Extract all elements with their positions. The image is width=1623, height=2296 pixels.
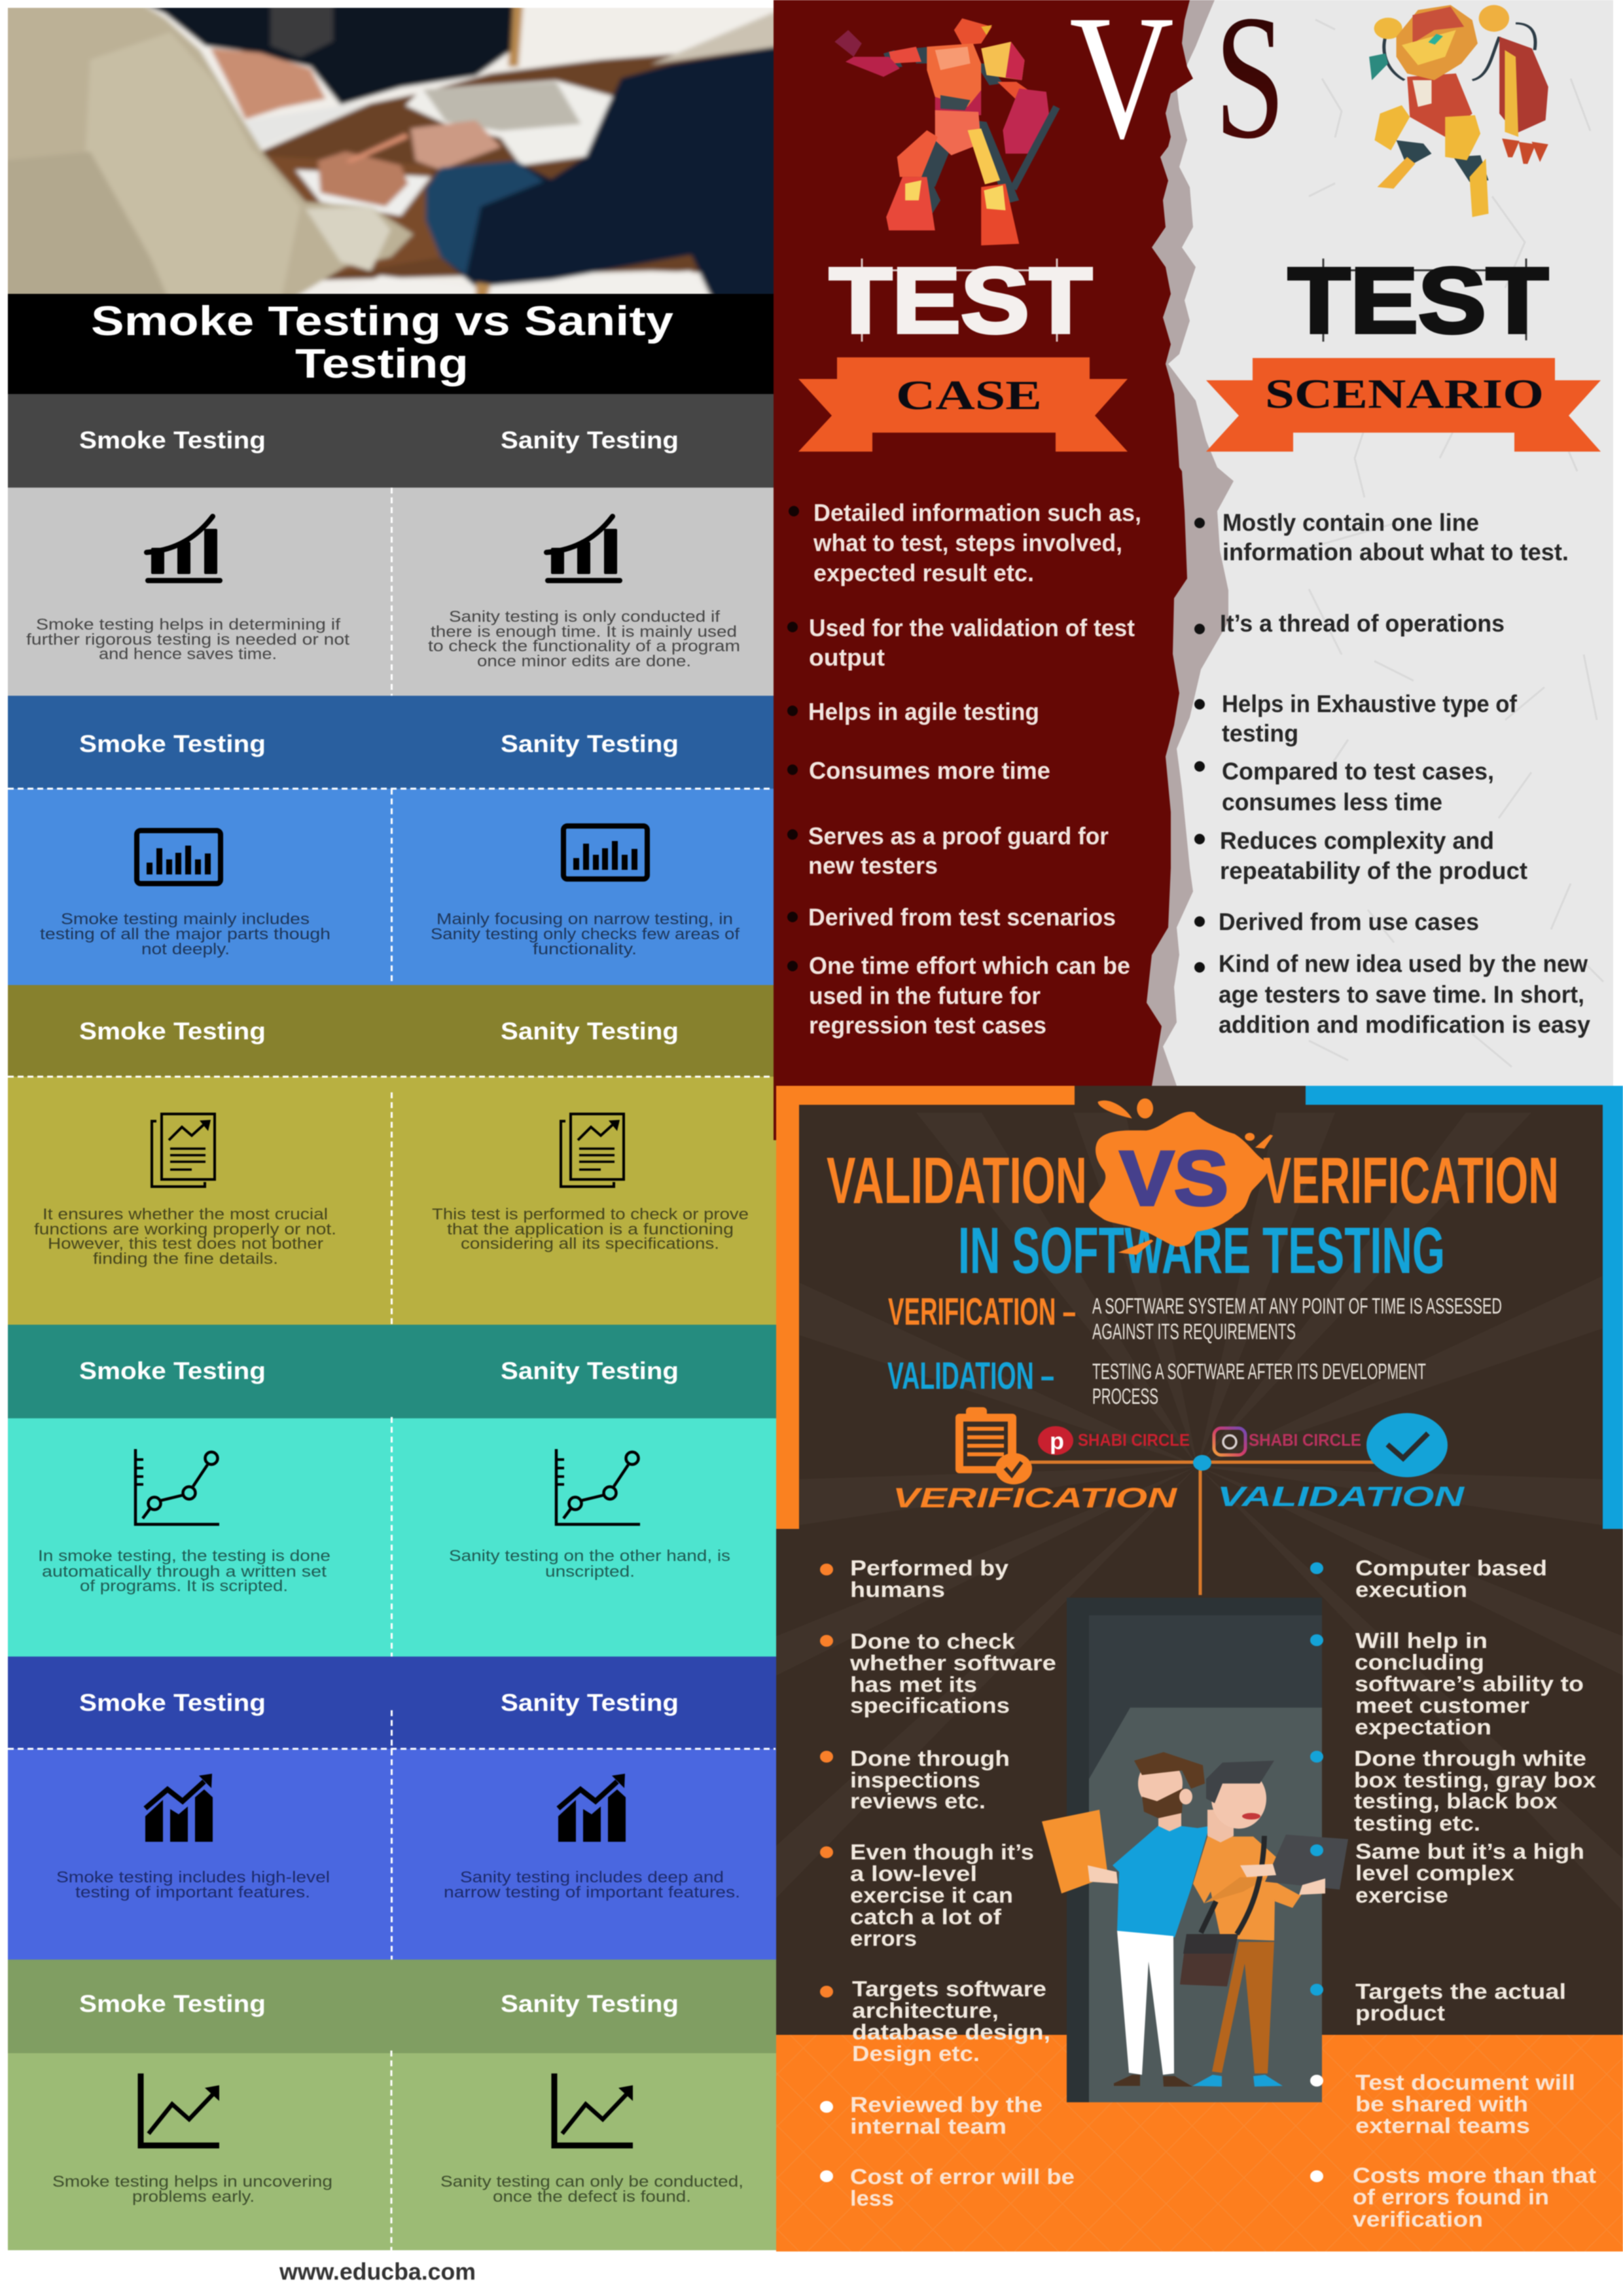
social: pinterest — [1038, 1426, 1190, 1455]
definition: verification: VERIFICATION – — [888, 1291, 1076, 1333]
text: smoke row 1: further rigorous testing is needed or not — [26, 631, 349, 649]
list: test case: expected result etc. — [813, 560, 1034, 586]
icon: growth chart right — [558, 1774, 626, 1842]
orange lower background — [776, 2035, 1623, 2251]
icon: growth chart left — [145, 1774, 213, 1842]
column headings: Sanity Testing — [501, 730, 679, 757]
list: validation points: Done through white — [1354, 1746, 1586, 1770]
title band — [8, 294, 776, 394]
text: sanity row 1 — [428, 608, 740, 670]
text: sanity row 4 — [449, 1547, 730, 1581]
row 6: green — [8, 1960, 776, 2250]
lattice texture — [776, 2035, 1623, 2251]
text: sanity row 4: Sanity testing on the other hand, is — [449, 1547, 730, 1565]
text: sanity row 4: unscripted. — [545, 1563, 635, 1581]
source url: www.educba.com — [279, 2258, 476, 2285]
list: verification points: Done through — [850, 1746, 1010, 1770]
text: smoke row 4: automatically through a written set — [42, 1563, 327, 1581]
text: smoke row 3: finding the fine details. — [93, 1250, 278, 1268]
vs splash: VS — [1120, 1136, 1228, 1222]
ribbon: case: CASE — [896, 372, 1042, 418]
icon: report right — [561, 1114, 624, 1187]
column headings — [79, 427, 679, 454]
list: test case: One time effort which can be — [809, 952, 1130, 979]
robot: yellow — [1369, 5, 1548, 217]
column headings: Sanity Testing — [501, 1018, 679, 1045]
text: smoke row 4: of programs. It is scripted. — [80, 1577, 288, 1595]
text: sanity row 1: to check the functionality of a program — [428, 637, 740, 655]
light paper side — [1139, 0, 1613, 1086]
list: validation points: Costs more than that — [1353, 2163, 1596, 2187]
text: sanity row 1: Sanity testing is only conducted if — [449, 608, 720, 626]
icon: trend chart left — [141, 2073, 219, 2145]
title: Smoke Testing vs Sanity — [91, 298, 673, 344]
sun rays — [776, 1113, 1623, 1911]
list: validation points: testing, black box — [1354, 1789, 1558, 1813]
list: verification points: internal team — [850, 2114, 1007, 2138]
photo: business meeting at table — [0, 0, 781, 303]
list: test scenario: Compared to test cases, — [1222, 758, 1494, 785]
brown background — [776, 1086, 1623, 2035]
blue frame — [1306, 1086, 1623, 1529]
text: smoke row 2: testing of all the major parts though — [40, 925, 330, 943]
list: verification points: Cost of error will be — [850, 2164, 1075, 2189]
list: validation points: concluding — [1355, 1650, 1484, 1674]
definition: verification: AGAINST ITS REQUIREMENTS — [1092, 1319, 1296, 1344]
panel: validation vs verification — [776, 1086, 1623, 2251]
list: test scenario — [1194, 509, 1590, 1038]
column headings — [79, 730, 679, 757]
icon: line chart right — [556, 1449, 640, 1524]
definition: validation — [887, 1355, 1426, 1409]
icon: trend chart right — [554, 2073, 633, 2145]
list: test case: what to test, steps involved, — [813, 529, 1122, 556]
list: verification points — [820, 1556, 1075, 2210]
text: smoke row 3: functions are working properly or not. — [34, 1221, 336, 1238]
torn paper edge — [1113, 0, 1234, 1086]
text: sanity row 3: considering all its specifications. — [461, 1235, 719, 1253]
list: test case: output — [809, 644, 885, 671]
list: verification points: specifications — [850, 1693, 1010, 1717]
list: verification points: catch a lot of — [850, 1905, 1002, 1929]
ribbon: scenario — [1206, 358, 1601, 452]
list: test case: regression test cases — [809, 1012, 1046, 1039]
text: smoke row 6 — [52, 2173, 332, 2206]
list: verification points: Reviewed by the — [850, 2092, 1043, 2117]
text: sanity row 5: narrow testing of important features. — [444, 1884, 740, 1901]
list: validation points: expectation — [1355, 1715, 1491, 1739]
list: verification points: humans — [850, 1577, 945, 1602]
list: validation points: execution — [1355, 1577, 1467, 1602]
text: sanity row 3 — [432, 1206, 749, 1253]
list: verification points: inspections — [850, 1768, 980, 1792]
column headings: Smoke Testing — [79, 1018, 266, 1045]
list: validation points: Same but it’s a high — [1355, 1839, 1584, 1863]
text: smoke row 5 — [56, 1869, 330, 1901]
text: smoke row 1 — [26, 616, 349, 663]
list: test case: Serves as a proof guard for — [808, 823, 1109, 850]
text: smoke row 1: and hence saves time. — [99, 645, 277, 663]
icon: dashboard right — [563, 826, 647, 879]
column headings — [79, 1018, 679, 1045]
text: smoke row 4: In smoke testing, the testing is done — [38, 1547, 330, 1565]
text: smoke row 3: However, this test does not bother — [48, 1235, 323, 1253]
ribbon: case — [798, 357, 1128, 452]
title: Testing — [295, 341, 469, 387]
social: pinterest: p — [1050, 1427, 1064, 1454]
list: validation points: box testing, gray box — [1354, 1768, 1597, 1792]
icon: report left — [152, 1114, 215, 1187]
list: validation points: Computer based — [1355, 1556, 1547, 1580]
connector lines — [1030, 1462, 1374, 1595]
social: pinterest: SHABI CIRCLE — [1078, 1430, 1190, 1450]
text: sanity row 3: This test is performed to check or prove — [432, 1206, 749, 1223]
social: instagram: SHABI CIRCLE — [1249, 1430, 1361, 1450]
panel: smoke testing vs sanity testing — [0, 0, 781, 2285]
list: test scenario: addition and modification is easy — [1219, 1011, 1590, 1038]
column headings: Smoke Testing — [79, 1990, 266, 2017]
figure: man in orange — [1180, 1761, 1348, 2087]
list: validation points: Will help in — [1355, 1628, 1488, 1653]
list: verification points: database design, — [852, 2020, 1050, 2044]
list: validation points: testing etc. — [1354, 1811, 1480, 1835]
list: verification points: architecture, — [852, 1998, 999, 2022]
row 5: indigo — [8, 1657, 776, 1960]
orange frame — [776, 1086, 1075, 1529]
list: verification points: has met its — [850, 1672, 977, 1696]
title — [91, 298, 673, 387]
text: sanity row 6: once the defect is found. — [493, 2188, 691, 2206]
row 4: teal — [8, 1325, 776, 1657]
list: verification points: Targets software — [852, 1977, 1046, 2001]
column headings: Sanity Testing — [501, 1990, 679, 2017]
vs splash — [1091, 1098, 1272, 1254]
text: smoke row 6: problems early. — [132, 2188, 255, 2206]
list: test case: Used for the validation of test — [809, 615, 1135, 641]
list: test case: new testers — [808, 852, 938, 879]
text: sanity row 2: Mainly focusing on narrow testing, in — [437, 910, 733, 928]
column headings — [79, 1990, 679, 2017]
list: verification points: less — [850, 2186, 894, 2210]
column headings: Sanity Testing — [501, 1689, 679, 1716]
definition: validation: PROCESS — [1092, 1384, 1158, 1409]
icon: bar chart curve left — [145, 516, 223, 583]
list: test scenario: Mostly contain one line — [1222, 509, 1479, 536]
heading: TEST right: TEST — [1288, 249, 1548, 353]
list: validation points — [1310, 1556, 1597, 2231]
text: smoke row 6: Smoke testing helps in uncovering — [52, 2173, 332, 2191]
text: sanity row 5: Sanity testing includes deep and — [460, 1869, 724, 1886]
list: test case: Detailed information such as, — [813, 499, 1141, 526]
icon: validated check — [1366, 1413, 1448, 1477]
text: sanity row 2 — [431, 910, 740, 958]
list: test scenario: repeatability of the product — [1220, 857, 1527, 884]
list: test scenario: Reduces complexity and — [1220, 827, 1494, 854]
figure: man in blue — [1042, 1752, 1209, 2087]
list: verification points: reviews etc. — [850, 1789, 986, 1813]
text: sanity row 6: Sanity testing can only be conducted, — [440, 2173, 743, 2191]
text: sanity row 6 — [440, 2173, 743, 2206]
text: smoke row 5: testing of important features. — [75, 1884, 310, 1901]
ribbon: scenario: SCENARIO — [1265, 371, 1544, 417]
list: verification points: errors — [850, 1926, 917, 1950]
row 3: olive — [8, 985, 776, 1325]
text: sanity row 1: once minor edits are done. — [477, 653, 691, 670]
list: verification points: Performed by — [850, 1556, 1009, 1580]
list: test case — [787, 499, 1141, 1039]
list: verification points: Design etc. — [852, 2041, 980, 2066]
list: validation points: level complex — [1355, 1861, 1515, 1885]
paper cracks texture — [1302, 20, 1603, 1067]
column headings — [79, 1357, 679, 1384]
text: sanity row 5 — [444, 1869, 740, 1901]
icon: line chart left — [135, 1449, 219, 1524]
list: validation points: verification — [1353, 2207, 1483, 2231]
icon: dashboard left — [137, 831, 221, 884]
list: validation points: meet customer — [1355, 1693, 1529, 1717]
social: instagram — [1214, 1428, 1361, 1455]
list: verification points: a low-level — [850, 1861, 977, 1886]
column headings: Sanity Testing — [501, 1357, 679, 1384]
label: verification: VERIFICATION — [893, 1482, 1177, 1514]
list: validation points: product — [1355, 2001, 1445, 2025]
list: verification points: exercise it can — [850, 1883, 1013, 1907]
label: validation: VALIDATION — [1217, 1481, 1465, 1513]
text: sanity row 1: there is enough time. It is mainly used — [431, 623, 737, 641]
list: validation points: exercise — [1355, 1883, 1448, 1907]
definition: validation: VALIDATION – — [887, 1355, 1054, 1397]
list: validation points: of errors found in — [1353, 2185, 1549, 2209]
list: test case: Helps in agile testing — [808, 698, 1039, 725]
heading: validation: VALIDATION — [827, 1144, 1087, 1217]
list: verification points: whether software — [849, 1651, 1056, 1675]
junction dot — [1193, 1455, 1211, 1471]
icon: clipboard — [955, 1407, 1032, 1484]
text: smoke row 5: Smoke testing includes high-level — [56, 1869, 330, 1886]
list: validation points: Targets the actual — [1355, 1979, 1566, 2003]
definition: validation: TESTING A SOFTWARE AFTER ITS DEVELOPMENT — [1092, 1359, 1426, 1384]
heading: TEST left: TEST — [829, 249, 1092, 353]
list: test case: Consumes more time — [809, 757, 1050, 784]
column headings: Smoke Testing — [79, 1689, 266, 1716]
column headings: Smoke Testing — [79, 427, 266, 454]
list: verification points: Done to check — [850, 1629, 1016, 1653]
text: smoke row 3: It ensures whether the most crucial — [43, 1206, 328, 1223]
list: validation points: external teams — [1355, 2113, 1530, 2138]
list: verification points: Even though it’s — [850, 1840, 1034, 1864]
illustration: two testers — [1042, 1752, 1348, 2087]
text: smoke row 2 — [40, 910, 330, 958]
column headings: Smoke Testing — [79, 730, 266, 757]
dark red side — [774, 0, 1193, 1140]
list: test case: Derived from test scenarios — [808, 904, 1116, 931]
row 2: blue — [8, 696, 776, 985]
robot: red — [834, 18, 1060, 245]
list: test scenario: Kind of new idea used by the new — [1219, 950, 1588, 977]
list: test scenario: consumes less time — [1222, 789, 1442, 816]
text: smoke row 2: Smoke testing mainly includes — [61, 910, 310, 928]
list: test scenario: Helps in Exhaustive type of — [1222, 691, 1518, 717]
list: validation points: software’s ability to — [1355, 1672, 1584, 1696]
column headings: Smoke Testing — [79, 1357, 266, 1384]
door backdrop — [1067, 1598, 1322, 2102]
list: test case: used in the future for — [809, 982, 1041, 1009]
list: test scenario: information about what to test. — [1222, 539, 1569, 565]
text: smoke row 1: Smoke testing helps in determining if — [36, 616, 340, 634]
icon: bar chart curve right — [545, 516, 622, 583]
text: smoke row 4 — [38, 1547, 330, 1595]
list: test scenario: Derived from use cases — [1219, 908, 1479, 935]
list: validation points: be shared with — [1355, 2092, 1528, 2116]
column headings — [79, 1689, 679, 1716]
list: test scenario: It’s a thread of operations — [1220, 610, 1505, 637]
text: sanity row 3: that the application is a functioning — [447, 1221, 734, 1238]
list: test scenario: age testers to save time. In short, — [1219, 981, 1584, 1008]
text: sanity row 2: functionality. — [533, 941, 637, 958]
row 1: grey — [8, 394, 776, 696]
text: sanity row 2: Sanity testing only checks few areas of — [431, 925, 740, 943]
column headings: Sanity Testing — [501, 427, 679, 454]
text: smoke row 3 — [34, 1206, 336, 1268]
panel: test case vs test scenario — [774, 0, 1613, 1140]
text: smoke row 2: not deeply. — [141, 941, 230, 958]
list: test scenario: testing — [1222, 720, 1298, 747]
list: validation points: Test document will — [1355, 2070, 1575, 2094]
definition: verification — [888, 1291, 1502, 1344]
